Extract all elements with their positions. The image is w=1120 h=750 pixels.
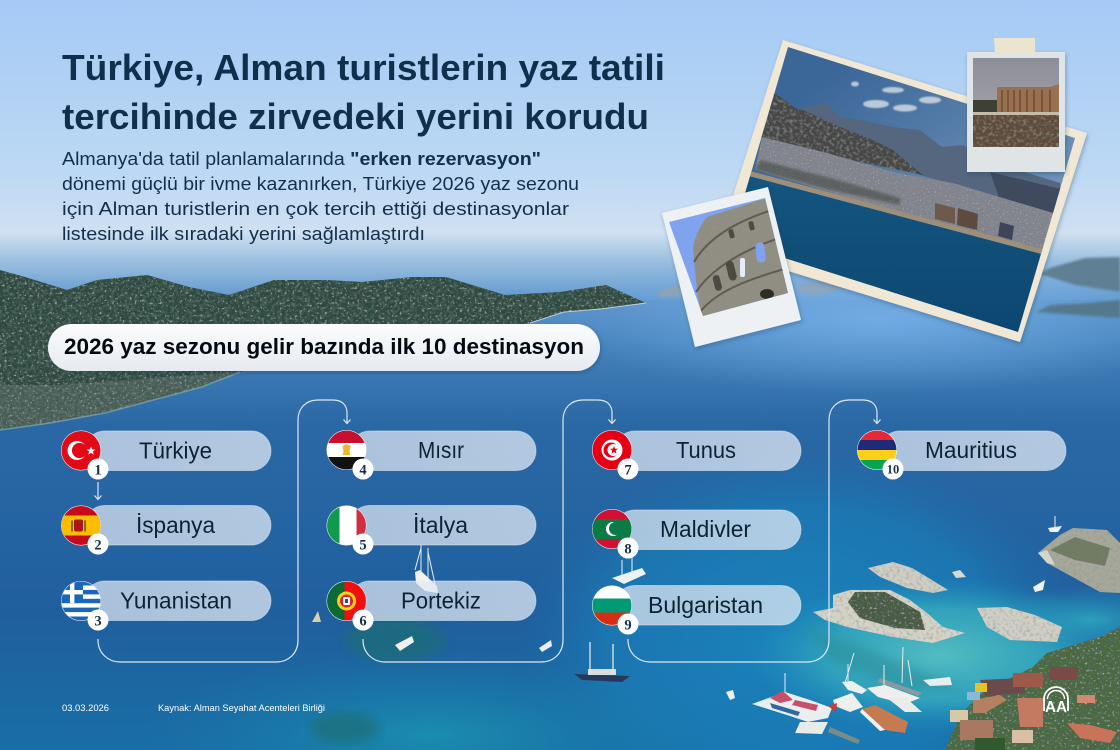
destination 1: Türkiye (61, 430, 271, 480)
title: Türkiye, Alman turistlerin yaz tatili (62, 47, 665, 88)
destination 5: İtalya (326, 506, 536, 554)
intro paragraph: için Alman turistlerin en çok tercih ettiği destinasyonlar (62, 199, 569, 219)
destination 6: Portekiz: 6 (359, 613, 367, 629)
connector arrows (94, 400, 880, 662)
icon: AA logo (1044, 687, 1068, 716)
harbour boats and piers (752, 647, 952, 744)
headland hills, left (0, 270, 646, 430)
intro paragraph (62, 149, 579, 244)
destination 9: Bulgaristan: 9 (624, 617, 632, 633)
destination 3: Yunanistan: Yunanistan (120, 588, 232, 614)
destination 3: Yunanistan (61, 581, 271, 630)
boats in the bay (312, 516, 1062, 700)
destination 9: Bulgaristan (592, 586, 801, 634)
icon: AA logo: AA (1045, 699, 1067, 716)
intro paragraph: dönemi güçlü bir ivme kazanırken, Türkiye 2026 yaz sezonu (62, 174, 579, 194)
intro paragraph: listesinde ilk sıradaki yerini sağlamlaştırdı (62, 224, 425, 244)
destination 9: Bulgaristan: Bulgaristan (648, 592, 763, 618)
islands (813, 528, 1120, 643)
destination 4: Mısır: Mısır (418, 437, 464, 463)
background: sky (0, 0, 1120, 310)
icon: masking tape (994, 38, 1035, 54)
coastal town (945, 627, 1120, 750)
destination 1: Türkiye: Türkiye (139, 438, 212, 464)
destination 8: Maldivler: Maldivler (660, 516, 751, 542)
title (62, 47, 665, 137)
background: sea (0, 250, 1120, 750)
destination 2: İspanya: İspanya (136, 512, 215, 538)
destination 3: Yunanistan: 3 (94, 613, 102, 629)
destination 6: Portekiz: Portekiz (401, 588, 481, 614)
distant islands (658, 257, 1120, 318)
destination 7: Tunus: 7 (624, 462, 632, 478)
destination 2: İspanya: 2 (94, 537, 102, 553)
destination 1: Türkiye: 1 (94, 462, 102, 478)
destination 5: İtalya: 5 (359, 537, 367, 553)
heading pill (48, 324, 600, 371)
destination 10: Mauritius: Mauritius (925, 437, 1017, 463)
heading pill: 2026 yaz sezonu gelir bazında ilk 10 destinasyon (64, 334, 584, 359)
sailboat (415, 545, 438, 593)
destination 2: İspanya (61, 506, 271, 554)
destination 7: Tunus: Tunus (676, 437, 736, 463)
destination 8: Maldivler: 8 (624, 541, 632, 557)
destination 10: Mauritius (857, 430, 1066, 480)
destination 10: Mauritius: 10 (887, 462, 899, 476)
footer source: Kaynak: Alman Seyahat Acenteleri Birliği (158, 703, 325, 713)
destination 4: Mısır (326, 430, 536, 480)
destination 5: İtalya: İtalya (413, 512, 468, 538)
destination 6: Portekiz (326, 581, 536, 630)
polaroid: Colosseum (662, 187, 801, 347)
intro paragraph: Almanya'da tatil planlamalarında "erken rezervasyon" (62, 149, 541, 169)
destination 8: Maldivler (592, 509, 801, 558)
footer date: 03.03.2026 (62, 703, 109, 713)
title: tercihinde zirvedeki yerini korudu (62, 96, 649, 137)
destination 4: Mısır: 4 (359, 462, 367, 478)
polaroid: Acropolis (967, 52, 1065, 172)
main photo: Antalya coast (716, 40, 1090, 342)
destination 7: Tunus (592, 430, 801, 480)
